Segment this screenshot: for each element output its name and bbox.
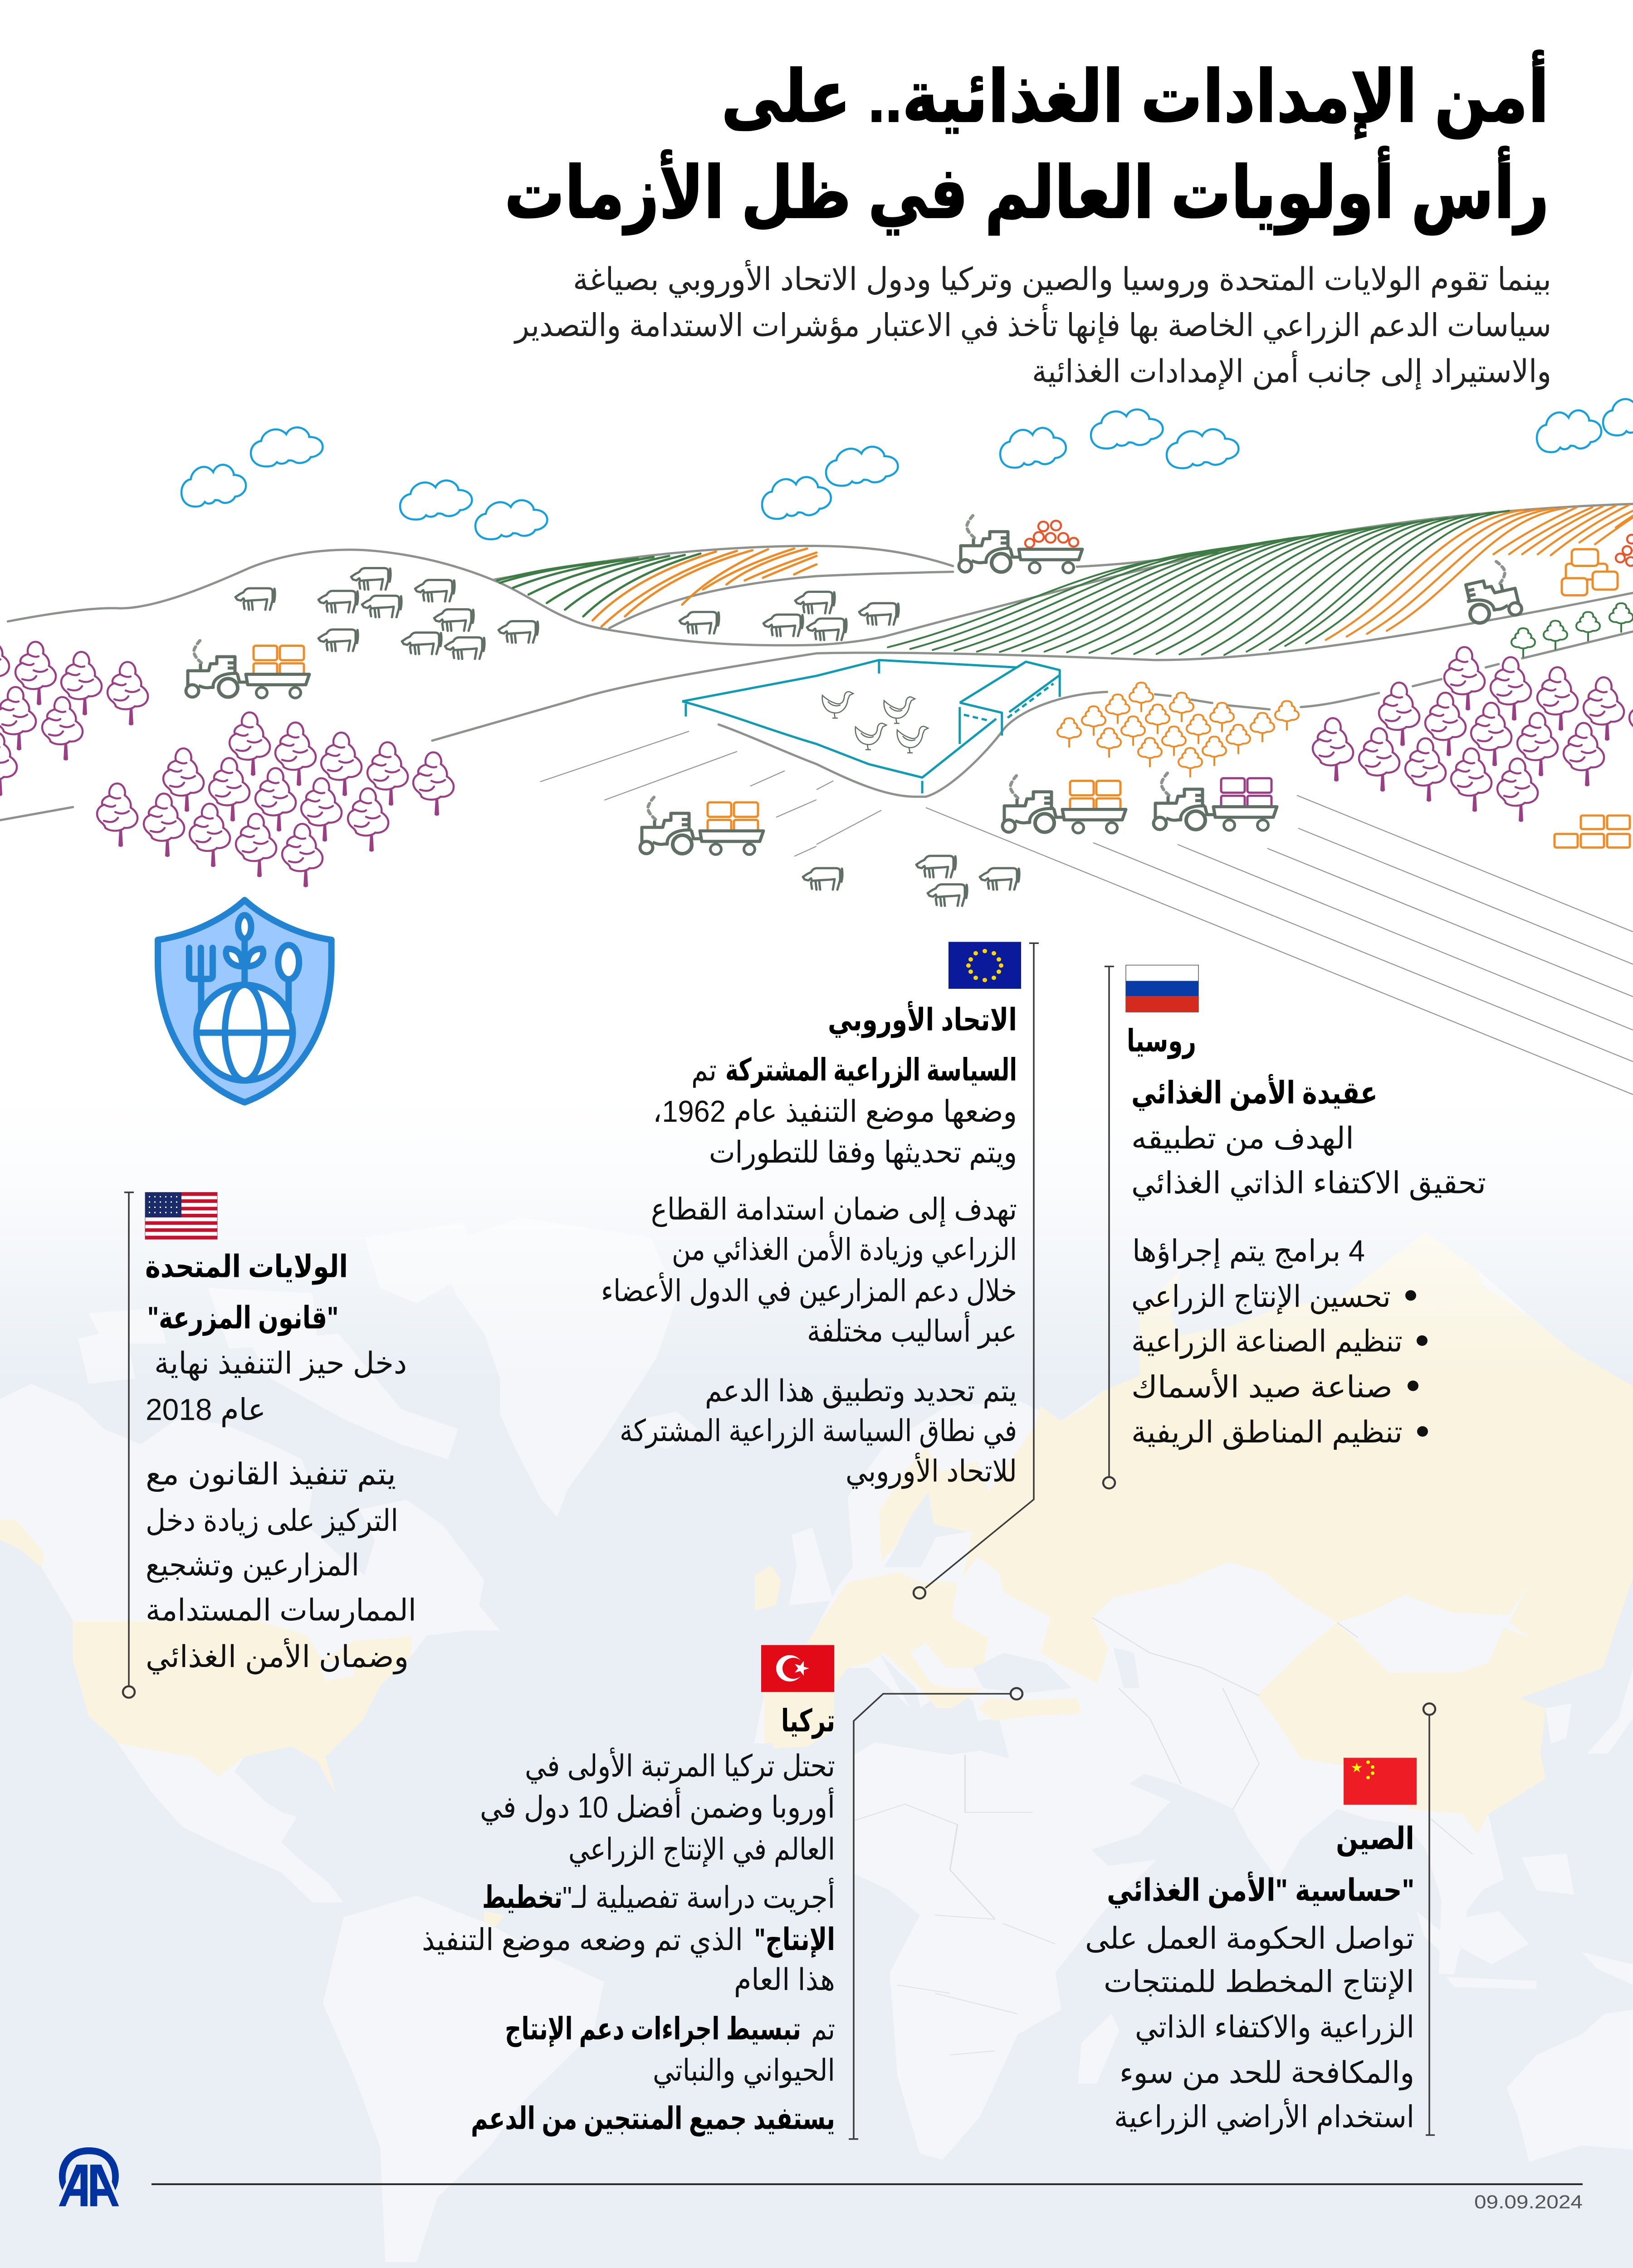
text block: Russia doctrine: الهدف من تطبيقه <box>1131 1122 1354 1156</box>
text block: EU policy: تم <box>691 1054 717 1088</box>
panel: European Union <box>601 942 1039 1598</box>
landmass: Americas north <box>0 1217 833 1902</box>
text block: Turkey support: تم <box>811 2013 835 2047</box>
landmass: South America <box>323 1896 604 2262</box>
bullet list: Russia programmes: 4 برامج يتم إجراؤها <box>1132 1234 1365 1269</box>
text block: Turkey production planning: الذي تم وضعه موضع التنفيذ <box>422 1923 743 1958</box>
text block: USA implementation: الممارسات المستدامة <box>146 1594 416 1628</box>
flag: USA <box>145 1193 217 1239</box>
bullet list: Russia programmes: تنظيم الصناعة الزراعية <box>1131 1325 1403 1359</box>
cows <box>235 568 1019 906</box>
text block: Russia doctrine: عقيدة الأمن الغذائي <box>1131 1074 1378 1111</box>
text block: Turkey support: تبسيط اجراءات دعم الإنتاج <box>505 2011 801 2048</box>
purple trees right <box>1313 647 1633 822</box>
text block: EU aims: الزراعي وزيادة الأمن الغذائي من <box>672 1231 1017 1267</box>
clouds <box>181 397 1633 539</box>
text block: Turkey ranking: أوروبا وضمن أفضل 10 دول في <box>480 1787 835 1825</box>
leader line: USA <box>123 1193 135 1698</box>
orange furrows <box>1326 505 1633 640</box>
intro paragraph: بينما تقوم الولايات المتحدة وروسيا والصين وتركيا ودول الاتحاد الأوروبي بصياغة <box>573 259 1551 298</box>
text block: Turkey production planning: تخطيط <box>482 1880 562 1915</box>
icon: food security shield <box>158 900 332 1102</box>
roads <box>540 731 1633 1095</box>
heading: China: الصين <box>1336 1821 1414 1857</box>
intro paragraph: سياسات الدعم الزراعي الخاصة بها فإنها تأخذ في الاعتبار مؤشرات الاستدامة والتصدير <box>513 303 1551 344</box>
text block: USA implementation: المزارعين وتشجيع <box>146 1549 359 1583</box>
text block: EU support: يتم تحديد وتطبيق هذا الدعم <box>705 1374 1017 1409</box>
text block: USA Farm Bill <box>146 1300 407 1427</box>
hay stack <box>1562 549 1618 595</box>
text block: EU aims: خلال دعم المزارعين في الدول الأعضاء <box>601 1272 1017 1309</box>
text block: EU support: في نطاق السياسة الزراعية المشتركة <box>620 1414 1017 1449</box>
chicken coop <box>682 660 1060 793</box>
title <box>504 50 1549 235</box>
text block: USA implementation: يتم تنفيذ القانون مع <box>146 1458 396 1492</box>
tractor with purple cargo <box>1154 772 1277 831</box>
tractor with logs <box>959 514 1082 573</box>
text block: China food security: الزراعية والاكتفاء الذاتي <box>1135 2010 1414 2045</box>
intro paragraph: والاستيراد إلى جانب أمن الإمدادات الغذائية <box>1032 351 1551 390</box>
leader line: Turkey <box>849 1688 1022 2139</box>
text block: Turkey ranking <box>480 1747 835 1867</box>
text block: Russia doctrine: تحقيق الاكتفاء الذاتي الغذائي <box>1131 1167 1486 1201</box>
leader line: China <box>1423 1703 1435 2135</box>
text block: USA implementation: التركيز على زيادة دخل <box>146 1504 398 1539</box>
text block: EU policy: السياسة الزراعية المشتركة <box>725 1052 1017 1088</box>
tractor with orange cargo, centre <box>640 796 763 855</box>
text block: Turkey ranking: تحتل تركيا المرتبة الأولى في <box>525 1747 835 1784</box>
text block: EU support <box>620 1374 1017 1489</box>
text block: Turkey production planning <box>422 1877 835 1997</box>
text block: Turkey support: يستفيد جميع المنتجين من الدعم <box>471 2101 835 2136</box>
purple trees left <box>0 632 454 887</box>
icon: AA logo <box>59 2147 119 2206</box>
green trees <box>1511 603 1633 658</box>
text block: USA Farm Bill: دخل حيز التنفيذ نهاية <box>154 1347 407 1381</box>
text block: Turkey production planning: أجريت دراسة تفصيلية لـ" <box>562 1877 835 1916</box>
text block: EU policy: وضعها موضع التنفيذ عام 1962، <box>653 1095 1017 1129</box>
text block: USA implementation: وضمان الأمن الغذائي <box>146 1638 409 1675</box>
rolling hills left <box>0 546 1633 820</box>
panel: China <box>1085 1703 1435 2135</box>
footer rule <box>152 2183 1583 2185</box>
heading: EU: الاتحاد الأوروبي <box>828 1001 1017 1038</box>
text block: Turkey production planning: هذا العام <box>734 1963 835 1997</box>
text block: China food security: تواصل الحكومة العمل على <box>1085 1922 1414 1956</box>
tractor on hillside <box>1459 557 1523 625</box>
text block: EU aims <box>601 1193 1017 1349</box>
big crop field and valley lines <box>816 504 1633 797</box>
text block: Turkey production planning: الإنتاج" <box>754 1922 835 1958</box>
text block: EU policy <box>653 1052 1017 1170</box>
text block: USA Farm Bill: "قانون المزرعة" <box>147 1300 338 1336</box>
text block: China food security: "حساسية "الأمن الغذائي <box>1107 1872 1414 1908</box>
bullet list: Russia programmes: صناعة صيد الأسماك <box>1131 1368 1393 1404</box>
map background <box>0 1097 1633 2268</box>
flag: Turkey <box>761 1645 834 1692</box>
text block: Turkey support <box>471 2011 835 2136</box>
orange orchard <box>1057 683 1299 777</box>
text block: China food security: استخدام الأراضي الزراعية <box>1114 2098 1414 2135</box>
panel: Turkey <box>422 1645 1022 2139</box>
text block: Turkey support: الحيواني والنباتي <box>653 2054 835 2088</box>
panel: United States <box>123 1193 416 1698</box>
text block: EU policy: ويتم تحديثها وفقا للتطورات <box>709 1136 1017 1170</box>
green furrows <box>888 511 1509 655</box>
panel: Russia <box>1103 965 1486 1488</box>
flag: Russia <box>1126 965 1198 1012</box>
date: 09.09.2024 <box>1474 2191 1583 2212</box>
text block: China food security: والمكافحة للحد من سوء <box>1120 2056 1414 2091</box>
text block: China food security <box>1085 1872 1414 2135</box>
tractor with orange cargo, right <box>1002 774 1126 833</box>
leader line: Russia <box>1103 967 1115 1488</box>
heading: Turkey: تركيا <box>781 1703 835 1739</box>
bullet list: Russia programmes: تحسين الإنتاج الزراعي <box>1131 1280 1391 1315</box>
text block: EU aims: عبر أساليب مختلفة <box>807 1311 1017 1349</box>
text block: USA implementation <box>146 1458 416 1675</box>
flag: EU <box>949 942 1021 989</box>
bullet list: Russia programmes: تنظيم المناطق الريفية <box>1131 1416 1403 1450</box>
small crop field <box>497 548 816 626</box>
text block: EU support: للاتحاد الأوروبي <box>846 1452 1017 1489</box>
tractor with orange cargo, upper left <box>186 639 309 698</box>
leader line: EU <box>914 943 1039 1598</box>
text block: Russia doctrine <box>1131 1074 1486 1201</box>
text block: EU aims: تهدف إلى ضمان استدامة القطاع <box>651 1193 1017 1227</box>
intro paragraph <box>513 259 1551 390</box>
landmass: Africa, Asia-Pacific and Australia <box>484 1691 1633 2162</box>
landmass: Eurasia <box>754 1232 1633 1974</box>
chickens <box>822 692 928 753</box>
bullet list: Russia programmes <box>1131 1234 1428 1450</box>
text block: Turkey ranking: العالم في الإنتاج الزراعي <box>568 1833 835 1867</box>
stacked crates <box>1555 816 1630 847</box>
flag: China <box>1344 1758 1417 1805</box>
pile of logs <box>1616 535 1633 566</box>
heading: Russia: روسيا <box>1127 1023 1196 1059</box>
heading: USA: الولايات المتحدة <box>145 1249 348 1285</box>
text block: USA Farm Bill: عام 2018 <box>146 1393 266 1427</box>
text block: China food security: الإنتاج المخطط للمنتجات <box>1104 1965 1414 1999</box>
